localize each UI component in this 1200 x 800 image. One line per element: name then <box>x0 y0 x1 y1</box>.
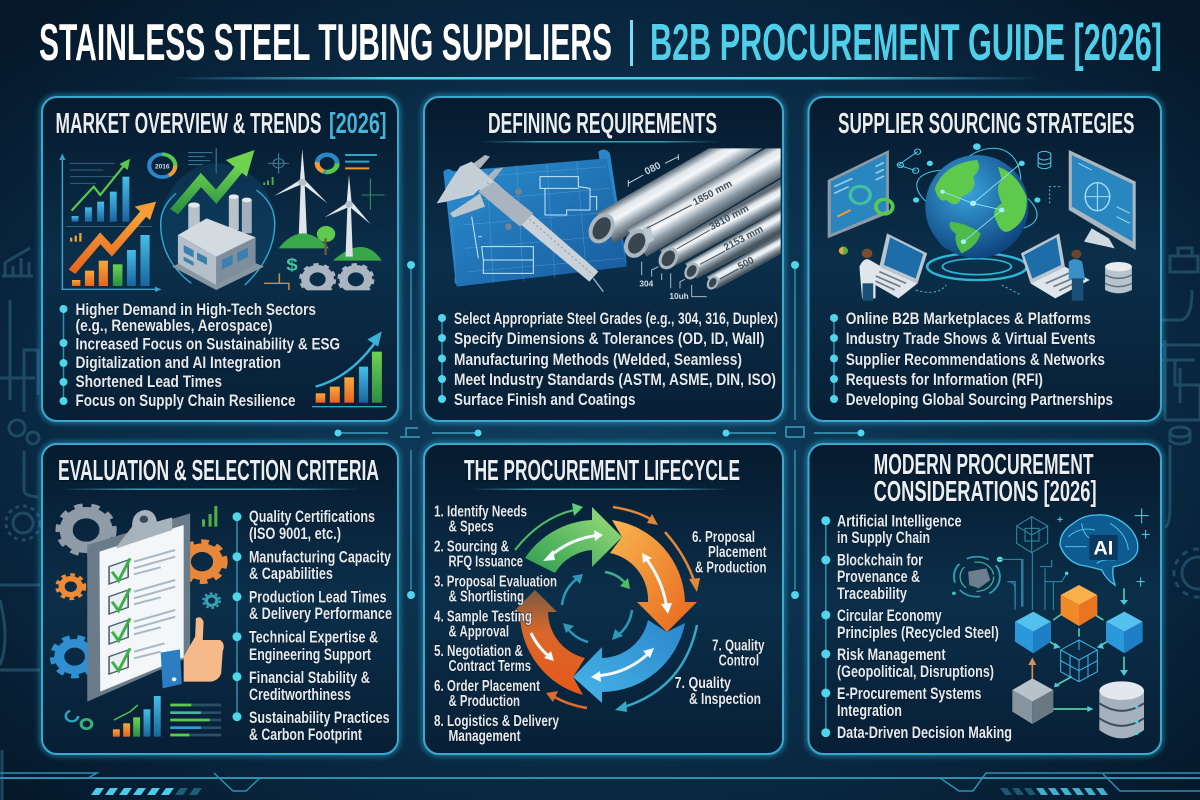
bullet list: requirements: Meet Industry Standards (ASTM, ASME, DIN, ISO) <box>454 370 776 389</box>
bullet list: requirements: Manufacturing Methods (Welded, Seamless) <box>454 350 742 369</box>
numbered steps list: 1. Identify Needs <box>434 504 527 521</box>
bullet list: criteria: Sustainability Practices <box>249 708 390 727</box>
right-side step labels: 7. Quality <box>675 675 731 692</box>
bullet list: market trends: Increased Focus on Sustainability & ESG <box>76 334 340 354</box>
bullet list: considerations: in Supply Chain <box>837 528 930 547</box>
panel: the procurement lifecycle <box>424 444 783 754</box>
panel: defining requirements <box>424 97 783 421</box>
illustration: steel tubes: 1850 mm <box>691 178 734 208</box>
bullet list: considerations: (Geopolitical, Disruptions) <box>837 662 994 681</box>
bullet list: considerations: Integration <box>837 701 902 720</box>
illustration: steel tubes: 3810 mm <box>708 203 751 233</box>
heading: evaluation: EVALUATION & SELECTION CRITERIA <box>58 455 379 487</box>
numbered steps list: Management <box>448 728 520 745</box>
heading: modern procurement <box>874 449 1097 508</box>
numbered steps list: 6. Order Placement <box>434 678 540 695</box>
bullet list: criteria: & Delivery Performance <box>249 604 392 623</box>
numbered steps list: 8. Logistics & Delivery <box>434 713 559 730</box>
bullet list: considerations: Circular Economy <box>837 606 942 625</box>
right-side step labels: 6. Proposal <box>692 529 755 546</box>
right-side step labels: & Production <box>695 560 766 577</box>
numbered steps list: & Shortlisting <box>448 589 524 606</box>
bullet list: criteria: Creditworthiness <box>249 685 351 704</box>
illustration: steel tubes: 10uh <box>669 291 689 301</box>
bullet list: criteria: Manufacturing Capacity <box>249 548 391 567</box>
bullet list: considerations: Risk Management <box>837 645 946 664</box>
illustration: steel tubes: 2153 mm <box>722 224 765 254</box>
bullet list: criteria: Technical Expertise & <box>249 628 378 647</box>
bullet list: sourcing: Developing Global Sourcing Partnerships <box>846 390 1113 409</box>
bullet list: market trends: Higher Demand in High-Tech Sectors <box>76 300 316 319</box>
bullet list: requirements: Specify Dimensions & Tolerances (OD, ID, Wall) <box>454 329 764 348</box>
bullet list: market trends: Digitalization and AI Integration <box>76 353 281 372</box>
bullet list: considerations: Provenance & <box>837 567 920 586</box>
bullet list: market trends <box>60 300 340 410</box>
panel: market overview and trends <box>42 97 398 421</box>
bullet list: considerations: Data-Driven Decision Making <box>837 723 1012 742</box>
background tech decoration <box>0 248 1200 800</box>
illustration: growth charts, factory and wind turbines: 2016 <box>155 164 170 170</box>
numbered steps list: RFQ Issuance <box>448 554 523 571</box>
bullet list: criteria: Production Lead Times <box>249 588 386 607</box>
heading: market overview: MARKET OVERVIEW & TRENDS <box>56 108 322 140</box>
heading: defining requirements: DEFINING REQUIREMENTS <box>488 108 717 140</box>
bullet list: considerations: Artificial Intelligence <box>837 512 962 531</box>
illustration: blueprint and caliper <box>437 150 627 292</box>
panel: supplier sourcing strategies <box>808 97 1161 421</box>
bullet list: sourcing: Supplier Recommendations & Networks <box>846 350 1105 369</box>
bullet list: considerations: E-Procurement Systems <box>837 684 982 703</box>
bullet list: requirements: Surface Finish and Coatings <box>454 390 636 409</box>
bullet list: requirements: Select Appropriate Steel Grades (e.g., 304, 316, Duplex) <box>454 309 778 328</box>
bullet list: considerations: Principles (Recycled Steel) <box>837 623 999 642</box>
illustration: steel tubes: 500 <box>736 255 757 273</box>
numbered steps list: 5. Negotiation & <box>434 643 523 660</box>
numbered steps list: 4. Sample Testing <box>434 609 532 626</box>
illustration: growth charts, factory and wind turbines: $ <box>286 255 298 274</box>
illustration: AI brain, blockchain cubes and database: AI <box>1093 538 1113 559</box>
bullet list: criteria <box>232 507 392 744</box>
panel: modern procurement considerations <box>808 444 1161 754</box>
bullet list: requirements <box>438 309 778 409</box>
heading: market overview: [2026] <box>329 108 386 140</box>
chart: circular lifecycle arrows <box>513 503 700 712</box>
bullet list: sourcing: Online B2B Marketplaces & Platforms <box>846 309 1091 328</box>
numbered steps list: & Specs <box>448 519 494 536</box>
right-side step labels <box>675 529 766 708</box>
numbered steps list: & Approval <box>448 624 509 641</box>
illustration: clipboard checklist with gears and thumbs up <box>52 506 225 737</box>
illustration: growth charts, factory and wind turbines <box>59 148 386 407</box>
panel: evaluation and selection criteria <box>42 444 398 754</box>
bullet list: sourcing: Industry Trade Shows & Virtual Events <box>846 329 1096 348</box>
numbered steps list: & Production <box>448 693 520 710</box>
bullet list: market trends: Focus on Supply Chain Resilience <box>76 391 296 410</box>
bullet list: criteria: Financial Stability & <box>249 668 370 687</box>
bullet list: criteria: (ISO 9001, etc.) <box>249 524 341 543</box>
bullet list: criteria: & Carbon Footprint <box>249 725 362 744</box>
illustration: AI brain, blockchain cubes and database <box>1007 508 1150 738</box>
numbered steps list <box>434 504 559 745</box>
right-side step labels: Control <box>719 653 759 670</box>
illustration: steel tubes: 080 <box>643 160 663 178</box>
bullet list: criteria: Quality Certifications <box>249 507 375 526</box>
bullet list: market trends: (e.g., Renewables, Aerospace) <box>76 316 272 335</box>
right-side step labels: & Inspection <box>689 691 761 708</box>
bullet list: considerations: Traceability <box>837 584 907 603</box>
bullet list: market trends: Shortened Lead Times <box>76 372 222 391</box>
bottom tech frame <box>0 773 1200 795</box>
bullet list: criteria: & Capabilities <box>249 564 333 583</box>
bullet list: considerations: Blockchain for <box>837 551 923 570</box>
bullet list: considerations <box>821 512 1012 742</box>
bullet list: sourcing <box>830 309 1113 409</box>
connector lines between panels <box>334 261 864 599</box>
illustration: circular chip emblem <box>952 557 1023 607</box>
right-side step labels: Placement <box>708 544 766 561</box>
illustration: globe, monitors and people <box>828 136 1136 301</box>
bullet list: criteria: Engineering Support <box>249 645 371 664</box>
bullet list: sourcing: Requests for Information (RFI) <box>846 370 1043 389</box>
illustration: steel tubes: 304 <box>639 279 654 289</box>
numbered steps list: 3. Proposal Evaluation <box>434 574 557 591</box>
heading: lifecycle: THE PROCUREMENT LIFECYCLE <box>464 455 740 487</box>
title: STAINLESS STEEL TUBING SUPPLIERS <box>39 14 612 72</box>
numbered steps list: 2. Sourcing & <box>434 539 509 556</box>
illustration: steel tubes <box>583 148 782 301</box>
numbered steps list: Contract Terms <box>448 658 531 675</box>
right-side step labels: 7. Quality <box>712 638 765 655</box>
